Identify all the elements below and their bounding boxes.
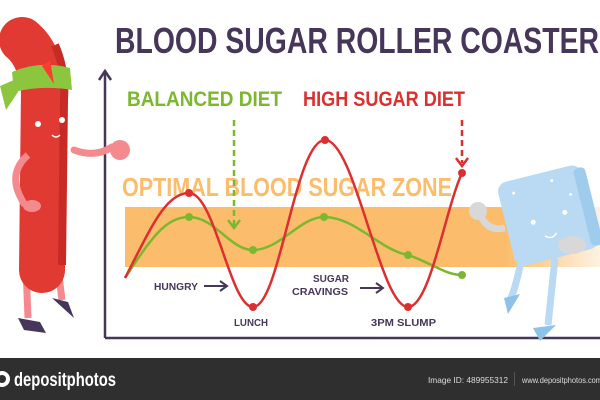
annotations: LUNCH <box>234 318 268 329</box>
red curve <box>125 136 466 311</box>
annotations: 3PM SLUMP <box>371 318 436 329</box>
high sugar diet label: HIGH SUGAR DIET <box>303 88 465 111</box>
optimal zone band <box>125 207 600 267</box>
character: chili pepper <box>0 40 130 333</box>
character: sugar cube <box>469 162 600 341</box>
green curve <box>125 213 466 279</box>
annotations: CRAVINGS <box>292 287 348 298</box>
annotations <box>154 274 436 329</box>
optimal zone label: OPTIMAL BLOOD SUGAR ZONE <box>122 172 452 202</box>
footer bar: depositphotos <box>14 370 116 391</box>
annotations: SUGAR <box>313 274 350 285</box>
balanced diet label: BALANCED DIET <box>127 88 282 111</box>
arrow: high sugar <box>456 120 468 166</box>
footer bar <box>0 358 600 400</box>
arrow: balanced diet <box>228 120 240 228</box>
footer bar: Image ID: 489955312 <box>428 375 508 385</box>
annotations: HUNGRY <box>154 282 198 293</box>
axes <box>99 71 600 338</box>
